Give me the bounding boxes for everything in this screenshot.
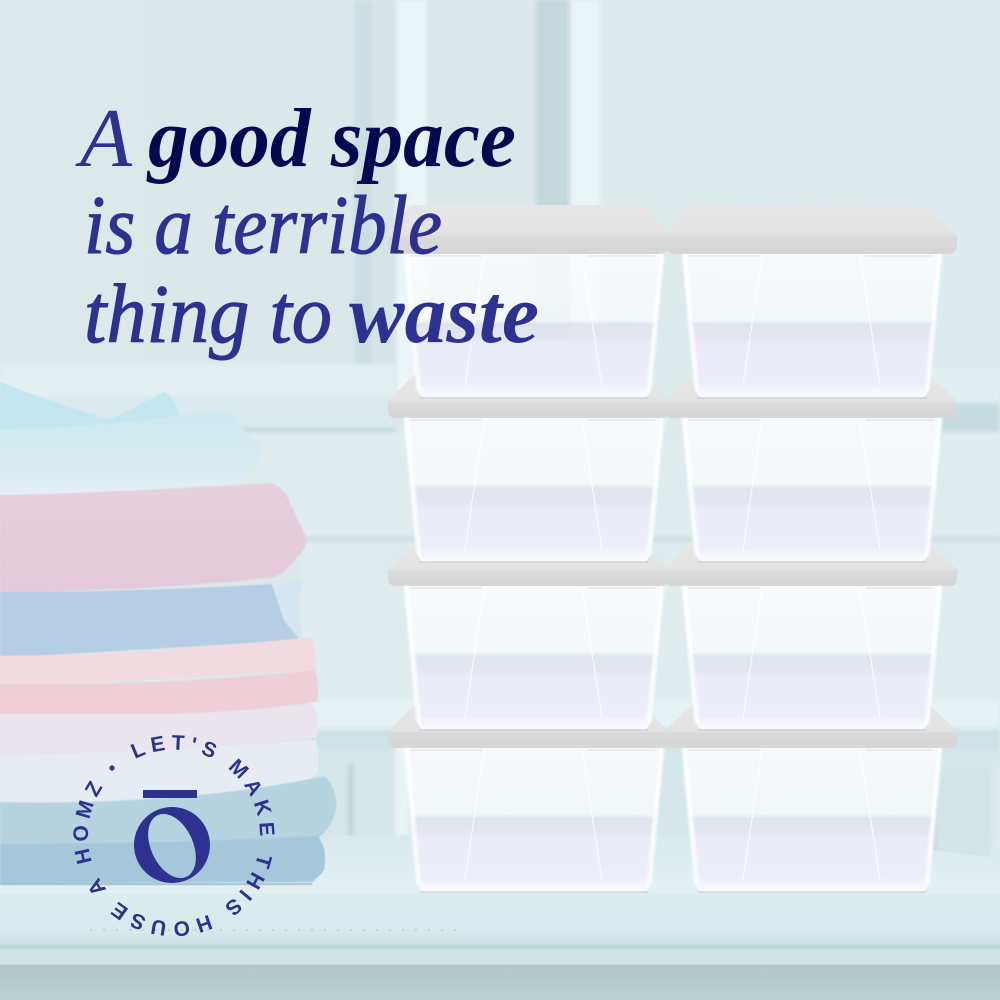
fabric: back blue fold	[0, 382, 180, 440]
row 2 containers	[388, 375, 957, 562]
headline: waste	[349, 268, 539, 361]
row 3 containers	[388, 543, 957, 730]
wainscot rails	[0, 364, 1000, 858]
stack of folded fabrics	[0, 382, 336, 884]
lid: top left	[388, 205, 668, 254]
headline: is a terrible	[84, 179, 442, 272]
headline	[75, 92, 539, 361]
lid: top right	[666, 205, 957, 254]
fabric: blue towel	[0, 584, 300, 658]
logo O mark	[134, 807, 210, 883]
fabric: pink knit two	[0, 670, 318, 716]
logo bar	[143, 790, 197, 798]
round logo badge	[73, 735, 275, 936]
fabric: deep blue knit	[0, 836, 325, 883]
headline: thing to	[84, 268, 332, 361]
circular slogan: LET'S MAKE THIS HOUSE A HOMZ	[73, 735, 275, 936]
window frame columns	[354, 0, 600, 395]
fabric: lavender knit	[0, 704, 318, 758]
fabric: blue knit	[0, 776, 336, 848]
row 1 containers	[388, 205, 957, 398]
row 4 containers	[388, 705, 957, 892]
table	[0, 836, 1000, 1000]
headline: A	[75, 92, 133, 185]
fabric: blue towel rear fold	[275, 579, 304, 640]
fabric: pink knit one	[0, 637, 316, 688]
fabric: pink towel	[0, 483, 306, 592]
headline: good space	[146, 92, 516, 185]
fabric: light blue towel	[0, 410, 262, 496]
fabric: white towel	[0, 740, 319, 806]
